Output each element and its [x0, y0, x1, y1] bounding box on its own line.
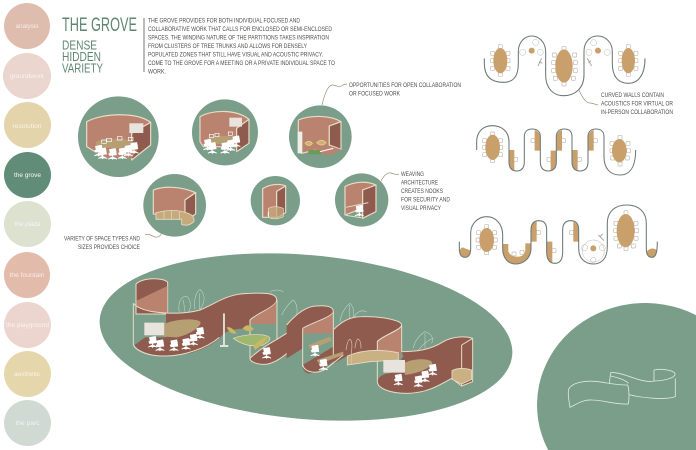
intro paragraph: WORK.	[148, 68, 166, 76]
callout: curved walls: CURVED WALLS CONTAIN	[601, 92, 664, 99]
floor plan 3	[459, 205, 657, 264]
subtitle keywords: DENSE	[62, 38, 97, 52]
intro paragraph: SPACES. THE WINDING NATURE OF THE PARTITIONS TAKES INSPIRATION	[148, 34, 329, 42]
nav: the fountain: the fountain	[10, 272, 45, 279]
callout: variety of space types: VARIETY OF SPACE TYPES AND	[64, 236, 140, 242]
intro paragraph: COLLABORATIVE WORK THAT CALLS FOR ENCLOSED OR SEMI-ENCLOSED	[148, 26, 332, 33]
callout: curved walls: ACOUSTICS FOR VIRTUAL OR	[601, 100, 673, 108]
nav: aesthetic	[4, 351, 51, 397]
nav: the parc: the parc	[16, 420, 40, 427]
floor plan 1	[484, 36, 645, 96]
intro paragraph: COME TO THE GROVE FOR A MEETING OR A PRIVATE INDIVIDUAL SPACE TO	[148, 60, 335, 67]
nav: analysis	[4, 3, 50, 49]
callout: weaving architecture: VISUAL PRIVACY	[401, 205, 441, 212]
callout: open collaboration	[322, 82, 461, 105]
callout: weaving architecture: FOR SECURITY AND	[401, 196, 450, 204]
nav: the playground	[4, 302, 51, 348]
large site ellipse	[93, 237, 519, 437]
nav: groundwork: groundwork	[10, 73, 45, 80]
nav: groundwork	[3, 53, 51, 99]
intro paragraph	[144, 18, 335, 76]
callout: weaving architecture	[381, 171, 450, 212]
subtitle keywords: VARIETY	[62, 60, 103, 76]
room vignette 3: open collaboration	[289, 105, 352, 168]
callout: curved walls	[579, 90, 673, 116]
callout: open collaboration: OR FOCUSED WORK	[349, 90, 400, 98]
right half of partition	[287, 303, 473, 393]
intro paragraph: FROM CLUSTERS OF TREE TRUNKS AND ALLOWS FOR DENSELY	[148, 43, 307, 50]
intro paragraph: POPULATED ZONES THAT STILL HAVE VISUAL AND ACOUSTIC PRIVACY.	[148, 52, 323, 58]
nav: the plaza	[4, 201, 51, 247]
callout: open collaboration: OPPORTUNITIES FOR OPEN COLLABORATION	[349, 82, 461, 89]
subtitle keywords	[62, 38, 103, 76]
sidebar navigation	[3, 3, 51, 446]
nav: the parc	[4, 400, 51, 446]
nav: resolution	[4, 102, 51, 148]
room vignette 1: large meeting room	[78, 96, 159, 177]
title: THE GROVE	[62, 15, 137, 36]
room vignette 6: nook with desk	[335, 173, 388, 227]
floor plan 2	[477, 126, 636, 175]
nav: resolution: resolution	[12, 123, 42, 130]
room vignette 5: small focus booth	[251, 176, 300, 225]
callout: variety of space types	[64, 231, 163, 251]
nav: the grove (active): the grove	[14, 172, 41, 179]
callout: curved walls: IN-PERSON COLLABORATION	[601, 109, 673, 116]
subtitle keywords: HIDDEN	[62, 49, 101, 64]
left half of partition	[133, 279, 300, 364]
room vignette 2: meeting room	[192, 99, 258, 165]
nav: the grove (active)	[4, 152, 51, 198]
corner green circle with ribbon icon	[537, 303, 696, 450]
nav: the plaza: the plaza	[14, 221, 41, 228]
callout: weaving architecture: ARCHITECTURE	[401, 180, 438, 186]
callout: weaving architecture: CREATES NOOKS	[401, 188, 443, 195]
callout: variety of space types: SIZES PROVIDES CHOICE	[78, 244, 140, 251]
nav: the fountain	[4, 252, 50, 298]
nav: analysis: analysis	[16, 23, 39, 30]
intro paragraph: THE GROVE PROVIDES FOR BOTH INDIVIDUAL FOCUSED AND	[148, 18, 300, 24]
room vignette 4: lounge banquette	[143, 174, 206, 237]
axonometric winding partition	[133, 279, 473, 393]
callout: weaving architecture: WEAVING	[401, 171, 424, 178]
icon: ribbon wall	[568, 369, 675, 407]
nav: aesthetic: aesthetic	[14, 371, 41, 378]
nav: the playground: the playground	[6, 322, 49, 329]
